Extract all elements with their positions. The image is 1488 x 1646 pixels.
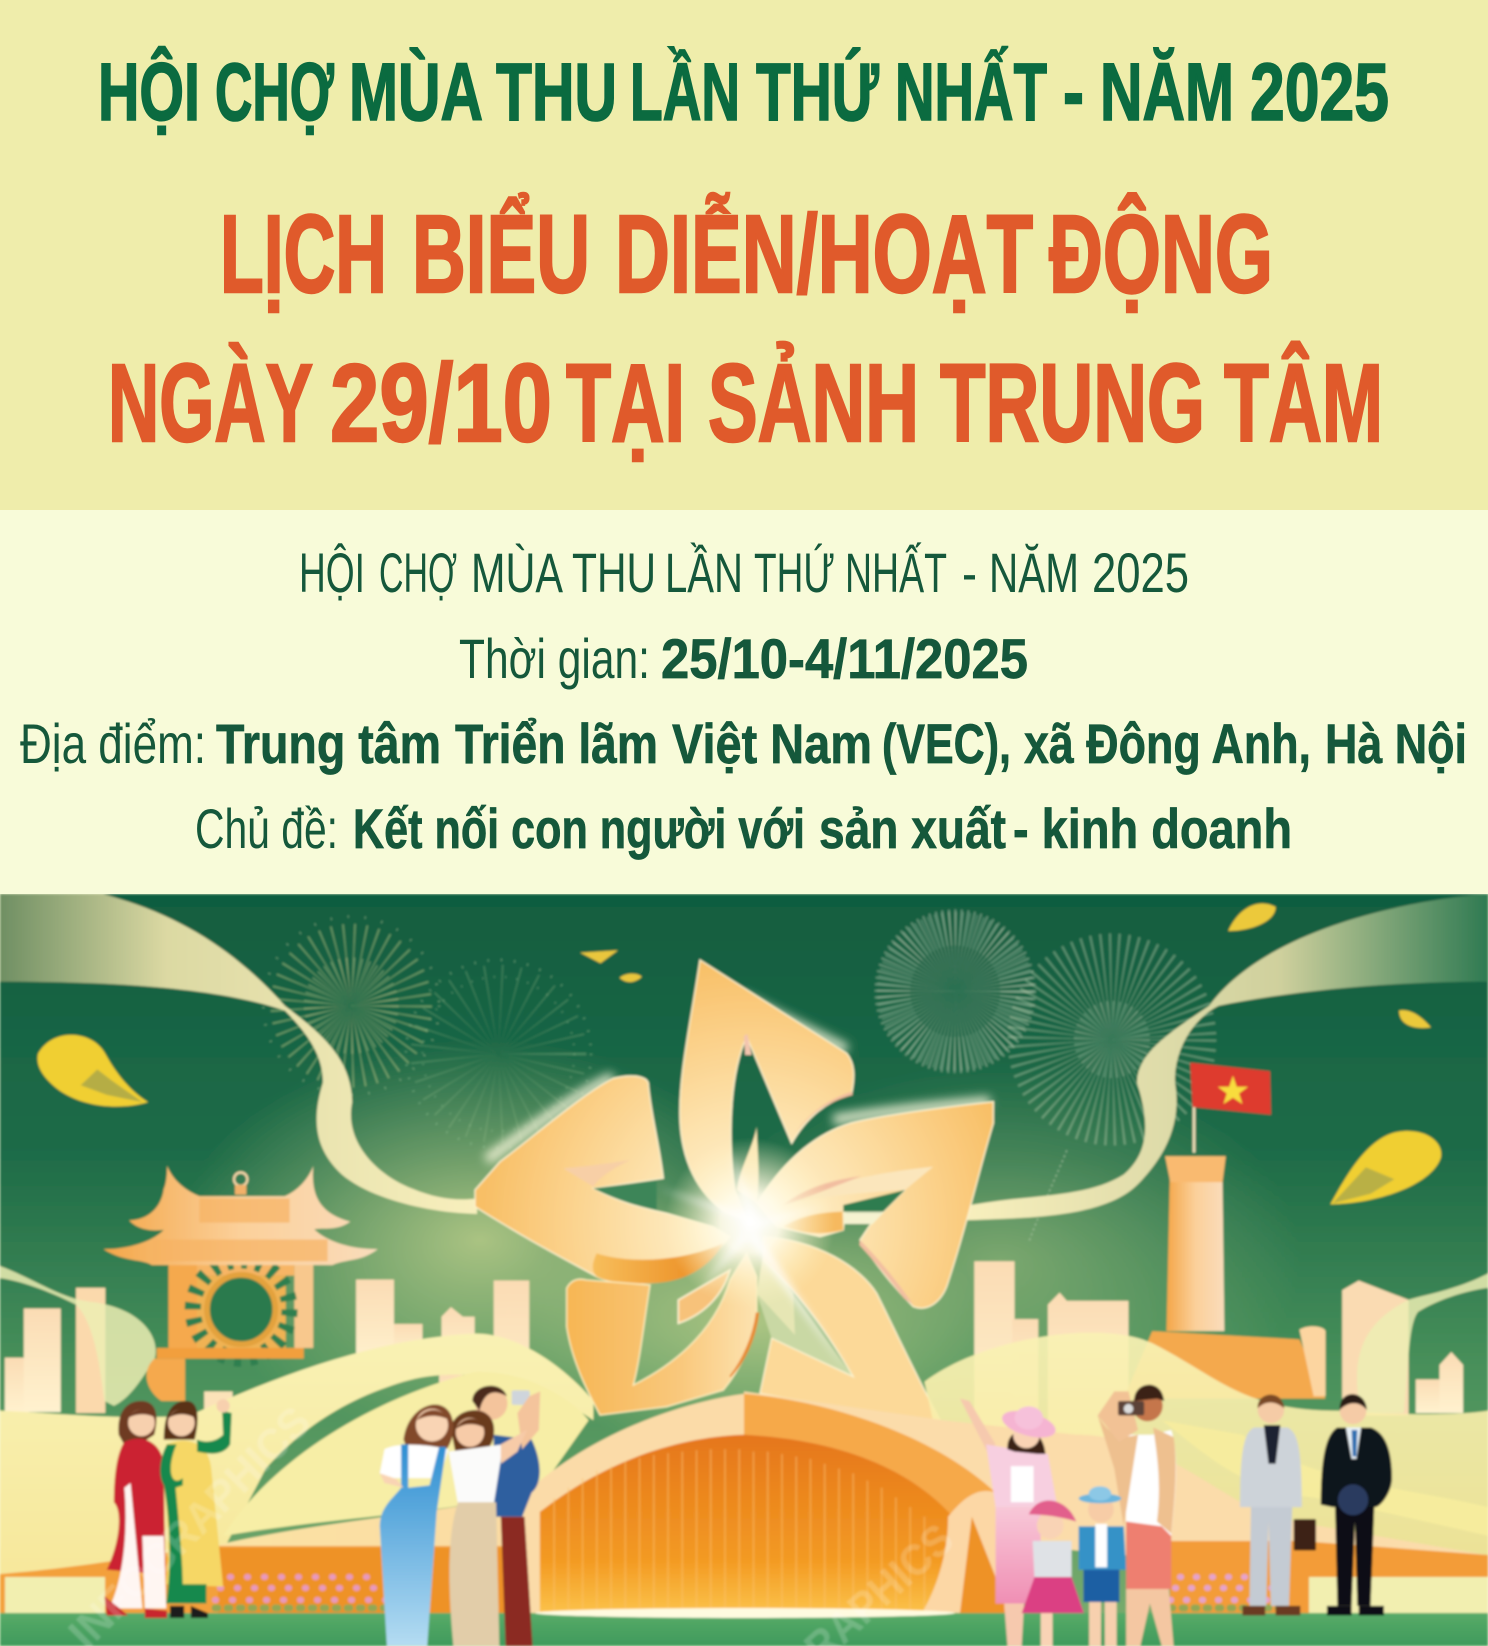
title: fair name — [98, 47, 1389, 138]
light burst: emblem centre — [655, 1138, 850, 1375]
woman in red ao dai — [104, 1401, 167, 1618]
text: fair name: 2025 — [1092, 541, 1189, 604]
ribbon: right wave — [924, 1333, 1488, 1560]
girl with pink hat — [1022, 1500, 1084, 1646]
illustration: autumn fair scene — [0, 894, 1488, 1646]
icon: Hanoi flag tower — [1124, 1063, 1326, 1399]
woman in green and yellow ao dai — [160, 1399, 232, 1618]
flower beds — [215, 1577, 1295, 1608]
glow behind emblem — [487, 997, 990, 1160]
heading: schedule line one: ĐỘNG — [1049, 193, 1273, 316]
man in blue jacket — [472, 1386, 540, 1646]
icon: Vietnamese flag — [1190, 1063, 1271, 1115]
flower: five-petal star emblem — [475, 960, 993, 1420]
title: fair name: NHẤT — [895, 47, 1047, 138]
petal: top — [680, 960, 854, 1220]
text: fair name: HỘI — [299, 541, 365, 604]
text: time: Thời gian: — [459, 627, 650, 690]
city skyline and tower right — [974, 1063, 1463, 1444]
people: family — [960, 1385, 1176, 1646]
text: fair name: CHỢ — [379, 541, 457, 604]
building: central orange dome — [516, 1394, 1015, 1613]
people: two businessmen — [1240, 1394, 1392, 1616]
text: venue: (VEC), — [882, 712, 1011, 775]
woman in pink — [960, 1399, 1058, 1646]
title: fair name: LẦN — [630, 47, 740, 138]
title: fair name: HỘI — [98, 47, 200, 138]
watermark — [59, 1397, 963, 1646]
petal: lower right — [757, 1253, 795, 1335]
title: fair name: NĂM — [1100, 47, 1234, 138]
text: theme — [195, 797, 1292, 860]
man taking a photo — [1098, 1385, 1176, 1646]
heading: schedule line two: TRUNG — [940, 342, 1205, 465]
text: venue: Triển lãm — [455, 712, 658, 775]
text: theme: Kết nối con người với — [353, 797, 805, 860]
heading: schedule line two: SẢNH — [708, 342, 919, 465]
petal: lower left — [567, 1253, 757, 1415]
text: fair name: - — [962, 541, 977, 604]
icon: falling leaves right — [1228, 904, 1441, 1204]
petal: right — [757, 1102, 993, 1308]
text: time — [459, 627, 1028, 690]
text: venue: xã Đông Anh, — [1024, 712, 1311, 775]
text: theme: Chủ đề: — [195, 797, 338, 860]
heading: schedule line two — [108, 342, 1383, 465]
ribbon: right edge — [1357, 1273, 1488, 1413]
title: fair name: 2025 — [1250, 47, 1389, 138]
text: fair name: THỨ — [754, 541, 835, 604]
title: fair name: MÙA — [349, 47, 483, 138]
title: fair name: - — [1063, 47, 1084, 138]
text: fair name: THU — [572, 541, 656, 604]
text: fair name — [299, 541, 1189, 604]
heading: schedule line one: LỊCH — [220, 193, 387, 316]
fireworks: left pair — [263, 917, 591, 1148]
background: green sky — [0, 894, 1488, 1646]
title: fair name: THỨ — [756, 47, 880, 138]
city skyline and gate left — [0, 1166, 529, 1440]
people: selfie group — [380, 1386, 540, 1646]
heading: schedule line two: 29/10 — [330, 342, 552, 465]
panel: fair information — [20, 541, 1467, 860]
text: fair name: MÙA — [471, 541, 563, 604]
title: fair name: CHỢ — [215, 47, 334, 138]
heading: schedule line one: BIỂU — [412, 193, 590, 316]
building: base platforms — [0, 1541, 1488, 1613]
panel: title header — [0, 0, 1488, 510]
ribbon: pale yellow waves — [0, 1334, 744, 1589]
ribbon: upper right — [967, 894, 1488, 1220]
inner light under lower right petal — [757, 1253, 853, 1377]
woman in white top and beige trousers — [449, 1410, 527, 1646]
text: fair name: NHẤT — [845, 541, 947, 604]
icon: temple gate — [103, 1166, 378, 1420]
heading: schedule line two: NGÀY — [108, 342, 313, 465]
girl in blue overalls — [380, 1404, 453, 1646]
heading: schedule line two: TÂM — [1224, 342, 1383, 465]
fireworks: right pair — [894, 929, 1164, 1242]
text: theme: sản xuất — [819, 797, 1006, 860]
heading: schedule line two: TẠI — [566, 342, 685, 465]
title: fair name: THU — [496, 47, 617, 138]
ribbon: upper left — [0, 894, 477, 1214]
heading: schedule line one — [220, 193, 1273, 316]
ribbon: far left — [0, 1266, 156, 1406]
people: two women in ao dai — [104, 1399, 232, 1618]
ground: green lawn — [0, 1608, 1488, 1646]
man in grey suit — [1240, 1395, 1316, 1616]
text: venue: Việt Nam — [672, 712, 872, 775]
man in black suit — [1321, 1394, 1392, 1616]
heading: schedule line one: DIỄN/HOẠT — [615, 193, 1033, 316]
text: fair name: LẦN — [665, 541, 743, 604]
petal: left — [475, 1076, 730, 1283]
boy with blue hat — [1079, 1486, 1126, 1646]
text: venue: Trung tâm — [216, 712, 441, 775]
text: theme: - kinh doanh — [1013, 797, 1292, 860]
icon: falling leaves left — [38, 950, 642, 1107]
text: time: 25/10-4/11/2025 — [661, 627, 1028, 690]
text: venue — [20, 712, 1467, 775]
text: venue: Địa điểm: — [20, 712, 206, 775]
buildings left — [5, 1280, 529, 1440]
buildings right — [974, 1261, 1463, 1444]
text: fair name: NĂM — [989, 541, 1079, 604]
